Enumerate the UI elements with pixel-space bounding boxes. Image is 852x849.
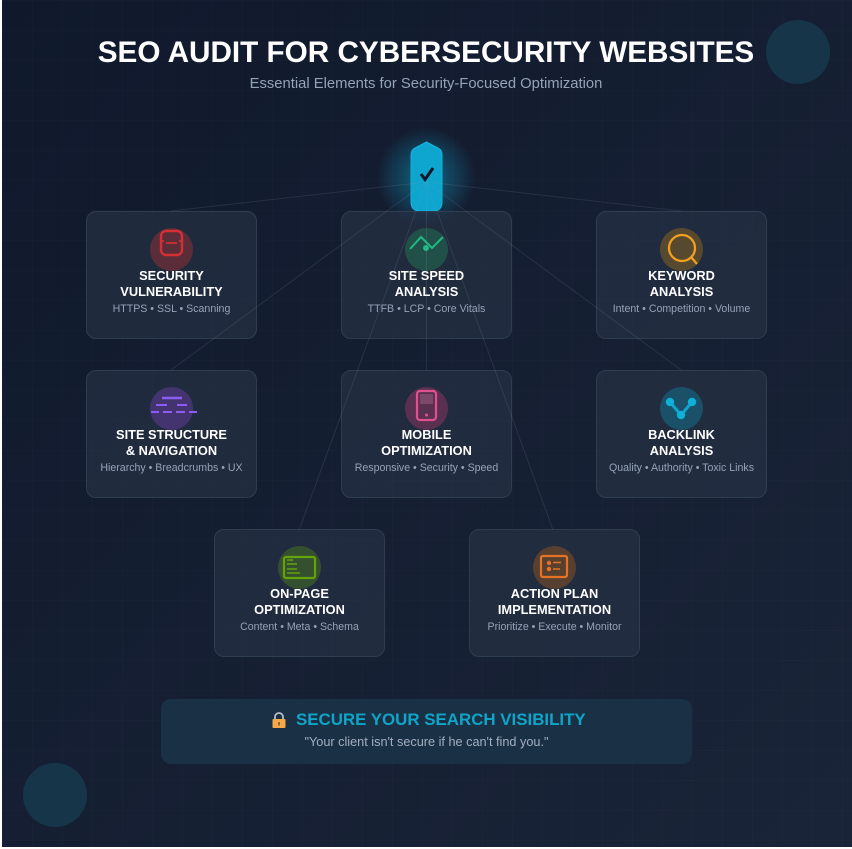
card: site structure xyxy=(86,370,257,498)
card: site speed: SITE SPEED xyxy=(389,268,464,283)
card: site structure: & NAVIGATION xyxy=(126,443,217,458)
card: keyword analysis: Intent • Competition • Volume xyxy=(613,303,750,315)
card: action plan: IMPLEMENTATION xyxy=(498,602,611,617)
card: site speed: ANALYSIS xyxy=(395,284,458,299)
icon: lock xyxy=(272,712,286,728)
callout quote: "Your client isn't secure if he can't find you." xyxy=(304,735,548,749)
icon: speed xyxy=(405,228,448,271)
card: security vulnerability: VULNERABILITY xyxy=(120,284,223,299)
card: backlink analysis: ANALYSIS xyxy=(650,443,713,458)
title: SEO AUDIT FOR CYBERSECURITY WEBSITES xyxy=(98,36,754,69)
icon: security xyxy=(150,228,193,271)
card: security vulnerability xyxy=(86,211,257,339)
callout heading: SECURE YOUR SEARCH VISIBILITY xyxy=(296,710,586,729)
card: security vulnerability: HTTPS • SSL • Scanning xyxy=(113,303,230,315)
card: backlink analysis: BACKLINK xyxy=(648,427,715,442)
card: site structure: Hierarchy • Breadcrumbs • UX xyxy=(100,462,243,474)
callout banner xyxy=(161,699,692,764)
icon: checklist xyxy=(533,546,576,589)
card: on-page optimization xyxy=(214,529,385,657)
card: site speed: TTFB • LCP • Core Vitals xyxy=(368,303,485,315)
card: keyword analysis xyxy=(596,211,767,339)
card: site structure: SITE STRUCTURE xyxy=(116,427,227,442)
card: on-page optimization: Content • Meta • Schema xyxy=(240,621,359,633)
card: security vulnerability: SECURITY xyxy=(139,268,204,283)
icon: magnifier xyxy=(660,228,703,271)
card: site speed xyxy=(341,211,512,339)
card: backlink analysis: Quality • Authority • Toxic Links xyxy=(609,462,754,474)
decorative circle: top right xyxy=(766,20,830,84)
card: mobile optimization: Responsive • Security • Speed xyxy=(355,462,498,474)
icon: links xyxy=(660,387,703,430)
card: mobile optimization xyxy=(341,370,512,498)
icon: content panel xyxy=(278,546,321,589)
card: on-page optimization: ON-PAGE xyxy=(270,586,329,601)
icon: hierarchy xyxy=(150,387,193,430)
card: mobile optimization: MOBILE xyxy=(402,427,451,442)
subtitle: Essential Elements for Security-Focused Optimization xyxy=(250,76,602,92)
icon: shield glow xyxy=(376,127,476,227)
card: action plan: Prioritize • Execute • Monitor xyxy=(488,621,622,633)
card: on-page optimization: OPTIMIZATION xyxy=(254,602,345,617)
card: keyword analysis: KEYWORD xyxy=(648,268,715,283)
card: action plan xyxy=(469,529,640,657)
icon: phone xyxy=(405,387,448,430)
card: backlink analysis xyxy=(596,370,767,498)
icon: shield xyxy=(410,142,442,211)
card: mobile optimization: OPTIMIZATION xyxy=(381,443,472,458)
decorative circle: bottom left xyxy=(23,763,87,827)
card: action plan: ACTION PLAN xyxy=(511,586,598,601)
card: keyword analysis: ANALYSIS xyxy=(650,284,713,299)
